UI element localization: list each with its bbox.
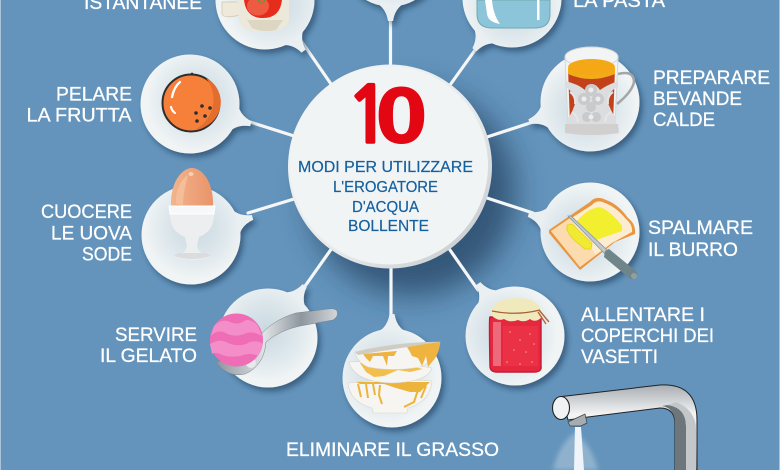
bubble: bowls: [342, 314, 442, 428]
label: pelare la frutta: LA FRUTTA: [26, 106, 132, 126]
top bowl: [355, 342, 440, 370]
label: servire il gelato: [100, 325, 197, 367]
label: allentare i coperchi dei vasetti: COPERCHI DEI: [581, 326, 714, 347]
label: cuocere le uova sode: SODE: [82, 244, 132, 266]
label: allentare i coperchi dei vasetti: VASETTI: [581, 347, 658, 368]
bubble: tea: [514, 40, 652, 169]
center circle shadow: [308, 88, 516, 296]
center heading text: L'EROGATORE: [333, 179, 438, 196]
icon: water pot: [477, 0, 550, 28]
label: spalmare il burro: SPALMARE: [648, 218, 753, 239]
bubble: ice cream: [199, 257, 345, 407]
panel: jam item: [438, 255, 714, 405]
number 10: 1: [345, 77, 392, 155]
water stream: [574, 427, 584, 470]
icon: greasy bowls: [348, 342, 440, 413]
center heading text: [298, 159, 473, 235]
label: pelare la frutta: [26, 84, 132, 126]
label: servire il gelato: IL GELATO: [100, 346, 197, 367]
label: cuocere le uova sode: [41, 202, 132, 266]
label: preparare bevande calde: BEVANDE: [653, 89, 742, 110]
label: allentare i coperchi dei vasetti: [581, 305, 714, 368]
panel: center circle: [288, 64, 492, 268]
label: eliminare il grasso: ELIMINARE IL GRASSO: [286, 440, 499, 461]
middle bowl: [349, 362, 432, 383]
bubble: top: [341, 0, 440, 21]
icon: mug with tomato: [222, 0, 289, 32]
icon: egg in cup: [169, 168, 215, 260]
faucet body: [562, 385, 697, 470]
icon: faucet: [552, 385, 697, 470]
steam: [553, 432, 598, 470]
panel: pasta item: [434, 0, 665, 79]
icon: toast with butter and knife: [549, 198, 637, 279]
panel: butter item: [515, 167, 753, 293]
icon: jam jar: [490, 298, 549, 372]
icon: orange: [162, 73, 221, 132]
nozzle: [568, 414, 587, 426]
label: spalmare il burro: IL BURRO: [648, 240, 738, 261]
center disc: [288, 64, 492, 268]
bubble: butter: [515, 167, 651, 293]
center heading text: D'ACQUA: [352, 199, 419, 216]
center heading text: MODI PER UTILIZZARE: [298, 159, 473, 176]
panel: egg item: [41, 168, 266, 296]
panel: bowls item: [286, 314, 499, 461]
bubble: jam: [438, 255, 584, 405]
center heading text: BOLLENTE: [348, 218, 429, 235]
label: spalmare il burro: [648, 218, 753, 261]
label: cuocere le uova sode: CUOCERE: [41, 202, 132, 223]
label: pelare la frutta: PELARE: [56, 84, 132, 106]
bubble: orange: [128, 42, 266, 171]
panel: ice cream item: [100, 257, 345, 407]
spout opening: [552, 396, 570, 420]
label: preparare bevande calde: PREPARARE: [653, 68, 770, 89]
connector lines: [248, 18, 533, 326]
label: servire il gelato: SERVIRE: [115, 325, 197, 346]
panel: tomato item: [84, 0, 343, 81]
icon: ice cream scoop: [210, 309, 338, 375]
bottom bowl: [348, 380, 432, 413]
bubble: egg: [130, 170, 266, 296]
icon: tea glass in holder: [565, 47, 634, 135]
silver holder lace: [565, 81, 618, 124]
bubble: pasta: [434, 0, 581, 79]
label: preparare bevande calde: [653, 68, 770, 131]
label: allentare i coperchi dei vasetti: ALLENTARE I: [581, 305, 705, 326]
label: preparare bevande calde: CALDE: [653, 110, 715, 131]
panel: tea item: [514, 40, 770, 169]
panel: top item: [341, 0, 440, 21]
bubble: tomato: [196, 0, 343, 81]
label: cuocere le uova sode: LE UOVA: [51, 224, 132, 244]
number 10: 0: [375, 72, 428, 161]
panel: orange item: [26, 42, 266, 171]
